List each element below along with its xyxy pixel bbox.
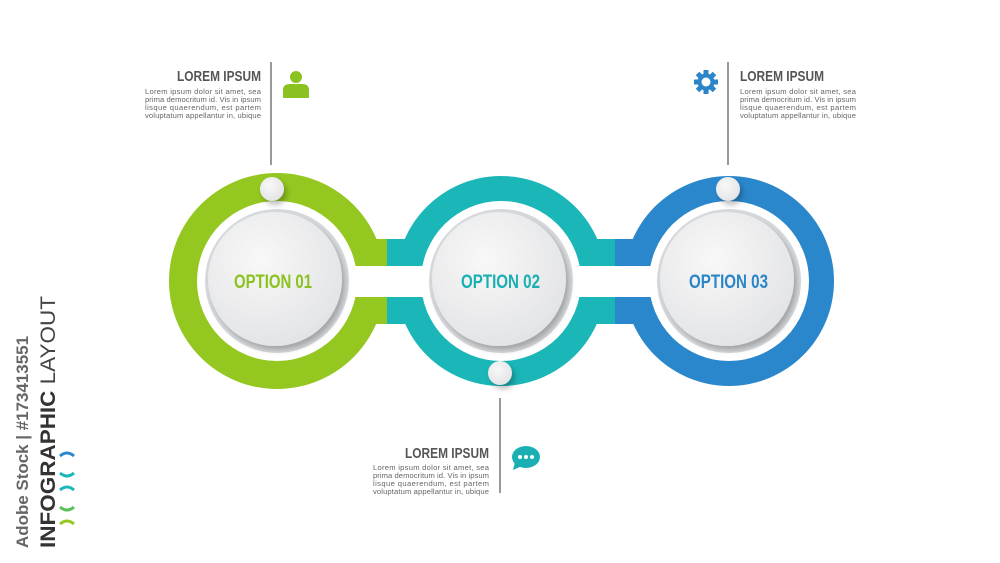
icon: chat bubble [512,446,540,470]
text block bottom: LOREM IPSUM [405,445,489,462]
text block right [740,68,857,120]
icon: person [283,71,309,98]
text block left: voluptatum appellantur in, ubique [145,111,261,120]
text block bottom: voluptatum appellantur in, ubique [373,487,489,496]
text block left: LOREM IPSUM [177,68,261,85]
knobs [260,177,740,385]
text block left [145,68,262,120]
text block bottom: lisque quaerendum, est partem [373,479,489,488]
option 01 disc [205,209,349,353]
text block right: lisque quaerendum, est partem [740,103,856,112]
option 01 disc: OPTION 01 [234,272,312,293]
ring 1 [169,173,400,389]
text block right: voluptatum appellantur in, ubique [740,111,856,120]
side caption [13,296,60,548]
icon: waves [60,453,74,524]
text block right: Lorem ipsum dolor sit amet, sea [740,87,857,96]
text block right: LOREM IPSUM [740,68,824,85]
text block left: prima democritum id. Vis in ipsum [145,95,261,104]
side caption: INFOGRAPHIC LAYOUT [37,296,60,548]
text block bottom: Lorem ipsum dolor sit amet, sea [373,463,490,472]
text block bottom: prima democritum id. Vis in ipsum [373,471,489,480]
option 03 disc: OPTION 03 [689,272,768,293]
ring 3 [610,176,834,386]
text block bottom [373,445,490,496]
option 02 disc: OPTION 02 [461,272,540,293]
option 02 disc [429,209,573,353]
text block left: lisque quaerendum, est partem [145,103,261,112]
icon: gear [694,70,718,94]
connector bars [277,239,729,324]
pointer lines [271,62,728,493]
ring 2 [380,176,630,386]
side caption: Adobe Stock | #173413551 [13,336,32,548]
text block left: Lorem ipsum dolor sit amet, sea [145,87,262,96]
text block right: prima democritum id. Vis in ipsum [740,95,856,104]
option 03 disc [657,209,801,353]
